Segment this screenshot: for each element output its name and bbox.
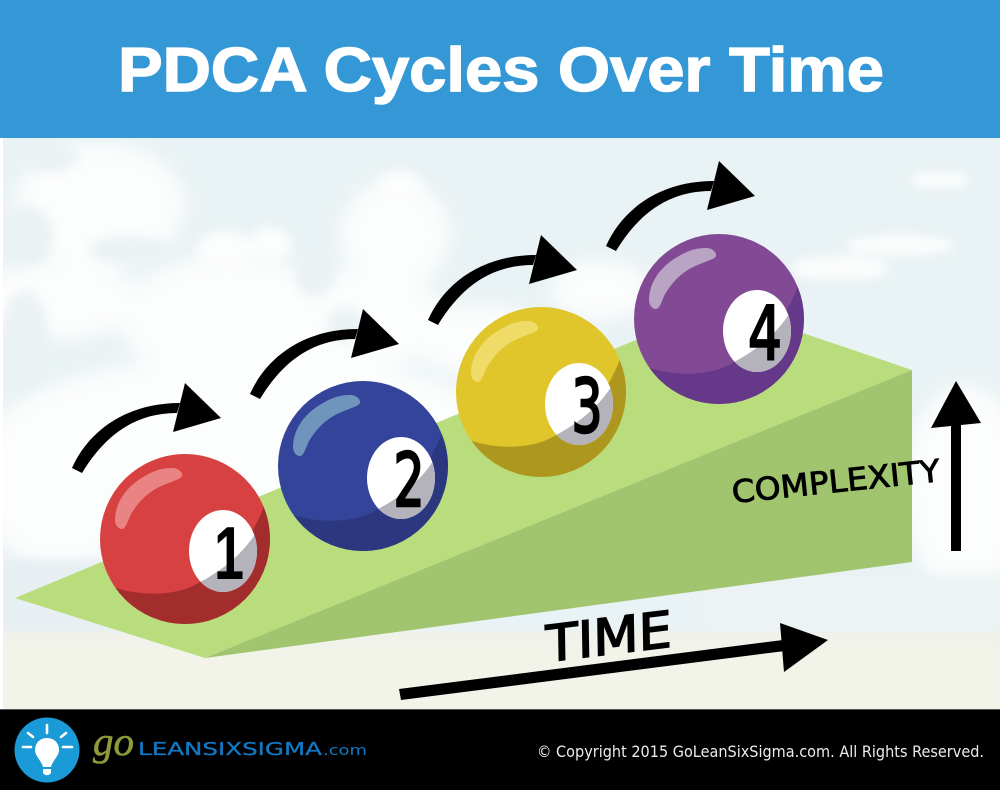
curved arrow 4 — [606, 161, 755, 251]
ramp top surface — [15, 305, 912, 658]
logo wordmark — [93, 719, 367, 764]
ball 3: yellow — [456, 307, 626, 477]
sky background with clouds — [0, 138, 1000, 710]
logo wordmark: LEANSIXSIGMA — [138, 739, 323, 760]
ball 3: yellow: 3 — [571, 364, 603, 450]
ball 1: red: 1 — [214, 511, 244, 595]
logo wordmark: go — [93, 719, 134, 764]
ramp side face — [205, 370, 912, 658]
ball 4: purple — [634, 234, 804, 404]
curved arrow 3 — [428, 235, 577, 325]
ball 4: purple: 4 — [748, 291, 782, 377]
label: complexity: COMPLEXITY — [730, 453, 942, 511]
label: time: TIME — [544, 599, 672, 674]
arrow: complexity up — [931, 381, 981, 551]
title: PDCA Cycles Over Time — [118, 36, 884, 105]
ball 1: red — [100, 454, 270, 624]
footer band — [0, 709, 1000, 790]
ball 2: blue: 2 — [393, 438, 425, 524]
green ramp — [15, 305, 912, 658]
arrow: time — [399, 623, 828, 700]
curved arrow 2 — [250, 309, 399, 399]
ball 2: blue — [278, 381, 448, 551]
horizon haze — [0, 560, 240, 632]
ground — [0, 632, 1000, 709]
logo wordmark: .com — [323, 743, 367, 759]
icon: lightbulb logo — [14, 718, 80, 782]
header band — [0, 0, 1000, 138]
curved arrow 1 — [72, 383, 221, 473]
